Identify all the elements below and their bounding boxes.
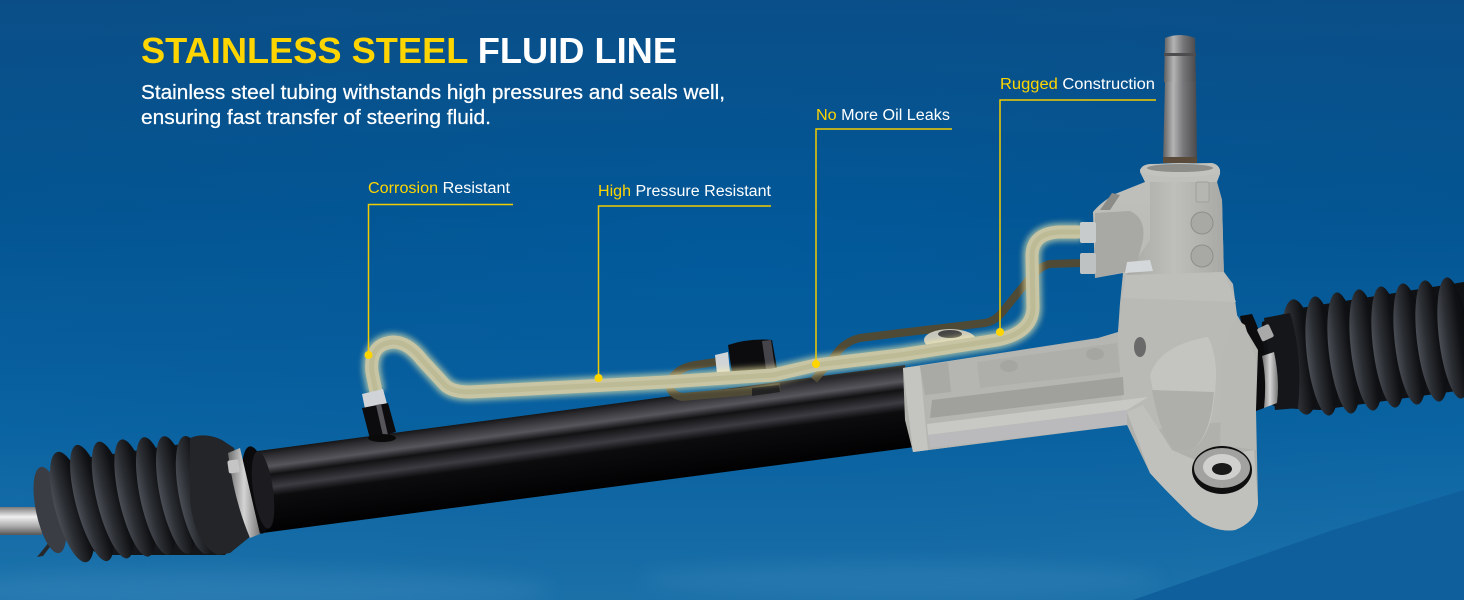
left hose clamp (228, 448, 260, 538)
callout: corrosion resistant (364, 180, 513, 359)
callout: high pressure resistant (594, 183, 772, 382)
callout: no more oil leaks: No More Oil Leaks (816, 107, 950, 124)
threaded hole (1134, 337, 1146, 357)
callout: no more oil leaks (812, 107, 952, 368)
top bolt (1125, 260, 1153, 273)
description: ensuring fast transfer of steering fluid. (141, 107, 491, 129)
port boss (1095, 211, 1143, 278)
callout: rugged construction (996, 76, 1156, 336)
right hose clamp (1240, 314, 1267, 411)
right tube nuts (1080, 222, 1096, 274)
stamped marks (1191, 212, 1213, 234)
inner tie rod (0, 507, 42, 535)
description: Stainless steel tubing withstands high pressures and seals well, (141, 82, 725, 104)
callout: rugged construction: Rugged Construction (1000, 76, 1155, 93)
rack housing ribs (903, 336, 1123, 452)
right rubber boot (1258, 276, 1464, 417)
bushing (1192, 446, 1252, 494)
mounting lug (1127, 405, 1258, 530)
callout: corrosion resistant: Corrosion Resistant (368, 180, 511, 197)
stainless steel fluid line, highlighted (372, 232, 1082, 392)
valve neck (1125, 182, 1224, 277)
banjo fitting (924, 329, 976, 351)
neck rim (1140, 163, 1220, 177)
mounting block (715, 340, 780, 396)
input shaft (1163, 35, 1197, 163)
callout: high pressure resistant: High Pressure Resistant (598, 183, 772, 200)
left rubber boot (27, 433, 256, 566)
cable tie (37, 541, 53, 557)
description (141, 82, 725, 129)
dark return line (670, 263, 1080, 397)
left tube fitting (362, 389, 396, 442)
lower valve block (1118, 272, 1240, 430)
bulge (1150, 337, 1216, 450)
tube collar (237, 445, 275, 535)
right flange (1220, 318, 1256, 450)
cast aluminium valve housing (903, 163, 1258, 530)
black rack tube (250, 365, 915, 534)
title: STAINLESS STEEL FLUID LINE (141, 30, 677, 71)
